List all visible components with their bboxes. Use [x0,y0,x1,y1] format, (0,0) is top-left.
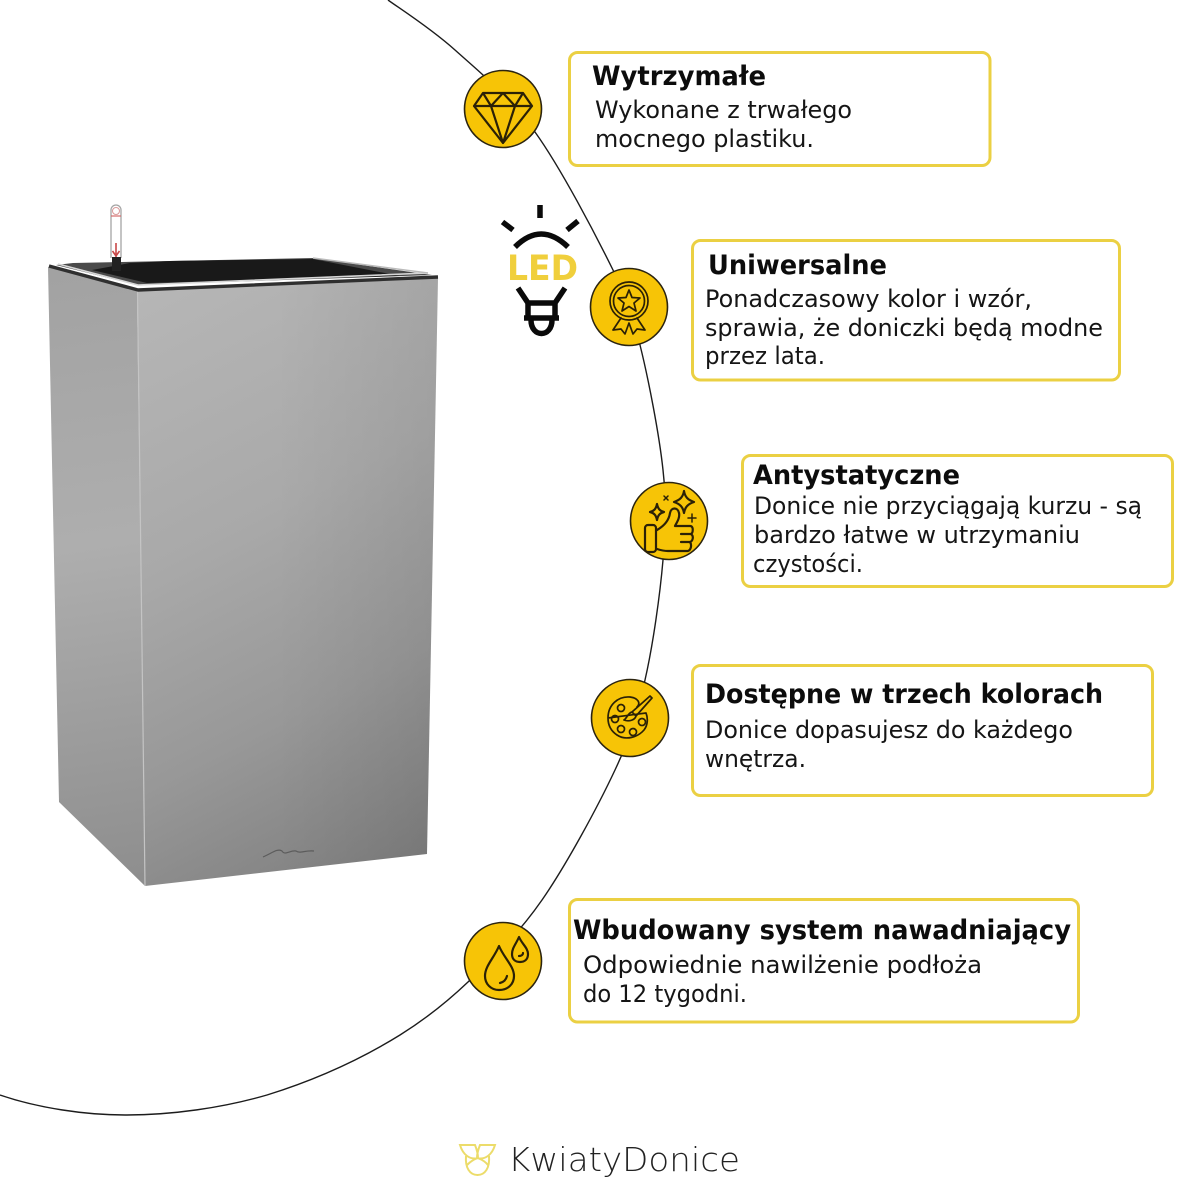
description: czystości. [753,550,863,578]
wordmark: KwiatyDonice [508,1140,740,1179]
description: wnętrza. [705,745,806,773]
description: bardzo łatwe w utrzymaniu [754,521,1080,549]
planter rim [49,258,438,290]
description: sprawia, że doniczki będą modne [705,314,1103,342]
connecting curve [0,0,666,1115]
brand signature on planter [263,850,314,857]
description: Odpowiednie nawilżenie podłoża [583,951,982,979]
description: Donice dopasujesz do każdego [705,716,1073,744]
LED bulb icon [502,205,578,334]
feature 5 icon: water drops [464,922,542,1000]
feature 2 icon: medal [590,268,668,346]
description: mocnego plastiku. [595,125,814,153]
feature 4 icon: paint palette [592,680,668,756]
heading: Wytrzymałe [592,61,766,92]
planter corner highlight [138,291,145,886]
feature 1 icon: diamond [464,70,542,148]
feature 1 panel: Wytrzymałe [570,52,990,166]
product: grey planter [48,205,438,886]
description: Ponadczasowy kolor i wzór, [705,285,1032,313]
water level indicator [111,205,121,271]
description [705,285,1103,370]
bulb top [515,234,568,247]
feature 5 panel: Wbudowany system nawadniający [570,900,1078,1022]
planter left face [48,267,145,886]
feature 2 panel: Uniwersalne [692,240,1120,380]
footer logo: KwiatyDonice [460,1140,740,1179]
heading: Wbudowany system nawadniający [573,915,1071,946]
description [583,951,982,1008]
heading: Dostępne w trzech kolorach [705,679,1103,710]
light rays [502,205,578,230]
description: do 12 tygodni. [583,980,747,1008]
description: Wykonane z trwałego [595,96,852,124]
heading: Uniwersalne [708,250,887,281]
LED label: LED [507,249,578,289]
logo mark: butterfly leaves [460,1145,495,1175]
description [595,96,852,153]
heading: Antystatyczne [753,460,960,491]
feature 3 icon: thumbs up with sparkles [630,482,708,560]
description [753,492,1142,578]
feature 3 panel: Antystatyczne [742,456,1172,586]
description [705,716,1073,773]
bulb base [518,288,565,334]
description: przez lata. [705,342,825,370]
feature 4 panel: Dostępne w trzech kolorach [692,666,1152,796]
description: Donice nie przyciągają kurzu - są [754,492,1142,520]
planter front face [137,278,438,886]
